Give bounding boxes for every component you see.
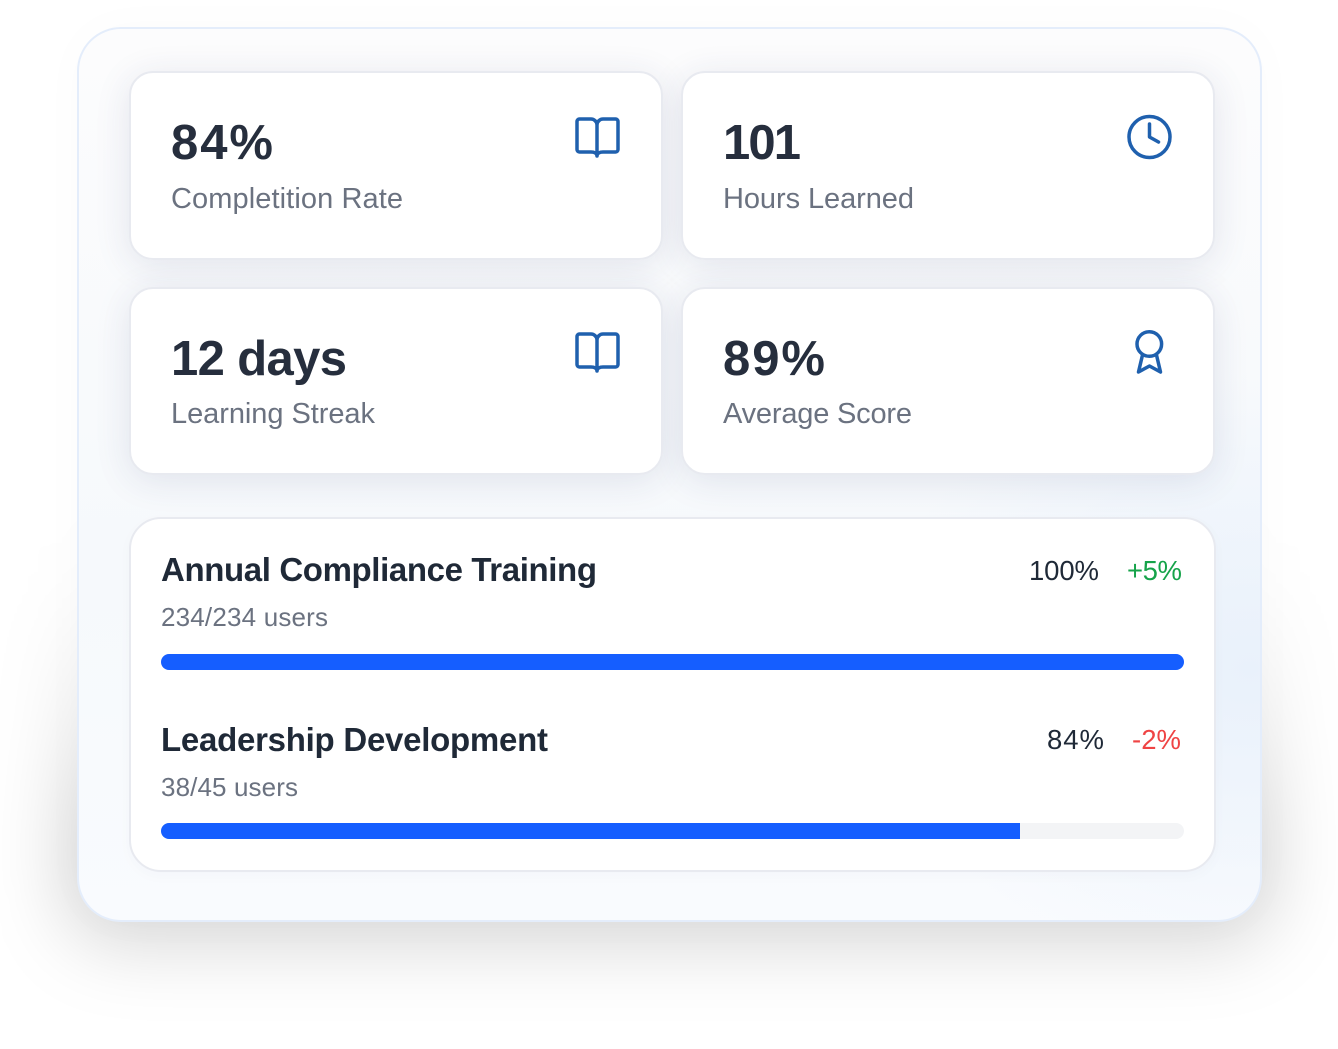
label: completion rate: Completition Rate [171, 183, 403, 215]
card: average score [681, 287, 1215, 475]
panel: dashboard container [77, 27, 1262, 922]
progress bar [161, 654, 1184, 670]
icon: open book [577, 334, 618, 371]
course title: Annual Compliance Training [161, 551, 597, 588]
label: hours learned: Hours Learned [723, 183, 914, 215]
value: 84%: 84% [171, 116, 273, 170]
user count: 38/45 users [161, 772, 298, 802]
panel: course progress [129, 517, 1216, 872]
label: average score: Average Score [723, 398, 912, 430]
completion percent: 100% [1029, 555, 1099, 586]
user count: 234/234 users [161, 602, 328, 632]
value: 12 days: 12 days [171, 332, 347, 386]
panel drop shadow [62, 505, 1276, 950]
icon: clock [1129, 116, 1170, 158]
value: 101: 101 [723, 116, 801, 170]
course title: Leadership Development [161, 721, 548, 758]
card: learning streak [129, 287, 663, 475]
course: annual compliance training [161, 551, 1184, 670]
card: completion rate [129, 71, 663, 260]
course: leadership development [161, 721, 1184, 839]
progress bar fill [161, 823, 1020, 839]
progress bar track [161, 823, 1184, 839]
value: 89%: 89% [723, 332, 825, 386]
label: learning streak: Learning Streak [171, 398, 376, 430]
negative change: -2% [1132, 724, 1181, 755]
icon: award ribbon [1137, 332, 1162, 372]
card: hours learned [681, 71, 1215, 260]
icon: open book [577, 119, 618, 156]
completion percent: 84% [1047, 724, 1104, 755]
positive change: +5% [1127, 555, 1182, 586]
